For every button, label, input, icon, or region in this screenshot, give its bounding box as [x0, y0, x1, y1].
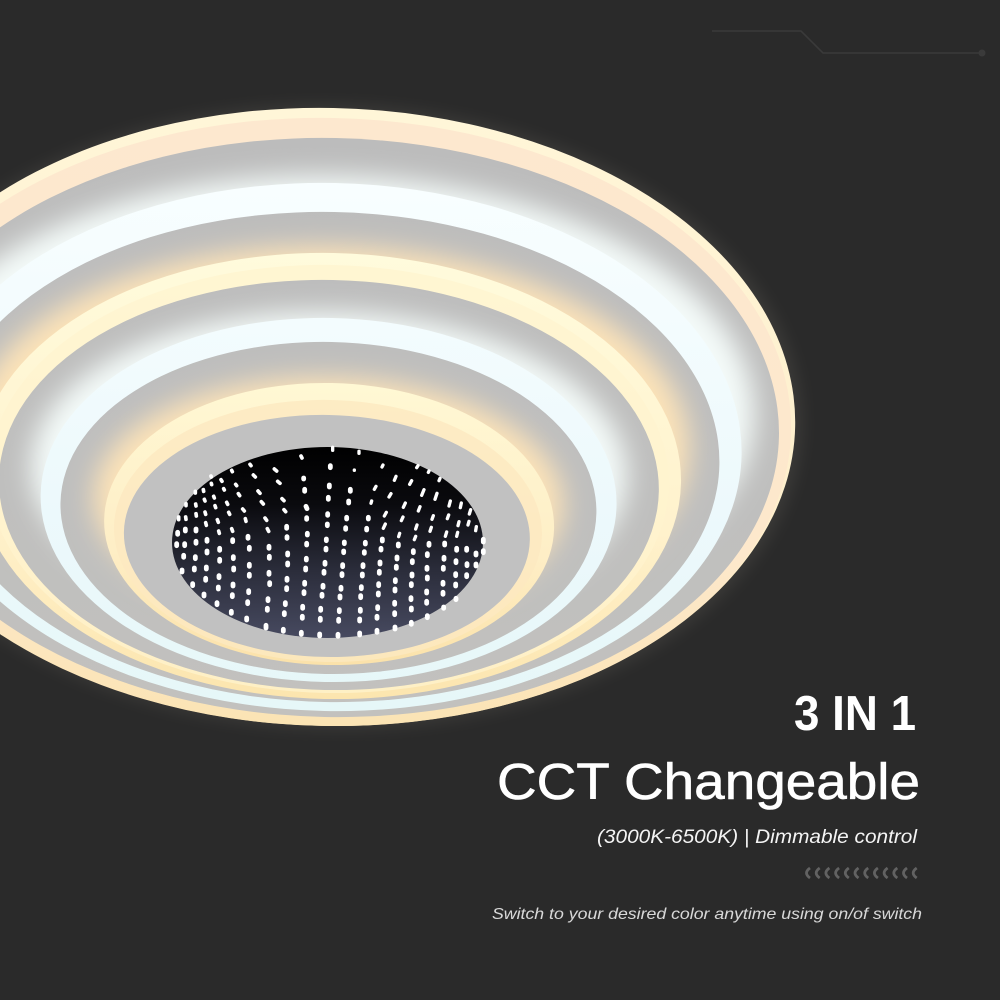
cool white band 2	[37, 312, 620, 688]
warm yellow band 3	[101, 379, 557, 669]
warm band 3 inner tone	[111, 396, 545, 666]
heading: 3 IN 1: 3 IN 1	[794, 687, 916, 741]
ceiling lamp	[0, 106, 802, 728]
mirror light dots	[177, 447, 483, 636]
heading: CCT Changeable: CCT Changeable	[497, 753, 920, 810]
grey panel 4 with warm glow	[60, 342, 596, 674]
outer cream rim	[0, 99, 801, 735]
chevron divider	[806, 868, 917, 878]
description text: Switch to your desired color anytime using on/of switch	[492, 906, 922, 923]
decorative circuit line with end dot	[712, 31, 986, 56]
inner grey ring	[121, 411, 532, 661]
warm yellow band 2	[0, 246, 685, 706]
grey panel 1 with white glow	[0, 138, 779, 718]
outer peach band	[0, 109, 797, 735]
grey panel 2 with warm glow	[0, 212, 720, 702]
grey panel 3 with white glow	[0, 280, 659, 690]
lamp concentric rings	[0, 108, 796, 726]
lamp outer halo	[0, 96, 808, 738]
infinity mirror centre	[172, 447, 483, 638]
cool white band 1	[0, 175, 747, 719]
subheading: colour range and dimming: (3000K-6500K) | Dimmable control	[597, 826, 918, 848]
warm band 2 inner tone	[0, 258, 673, 700]
